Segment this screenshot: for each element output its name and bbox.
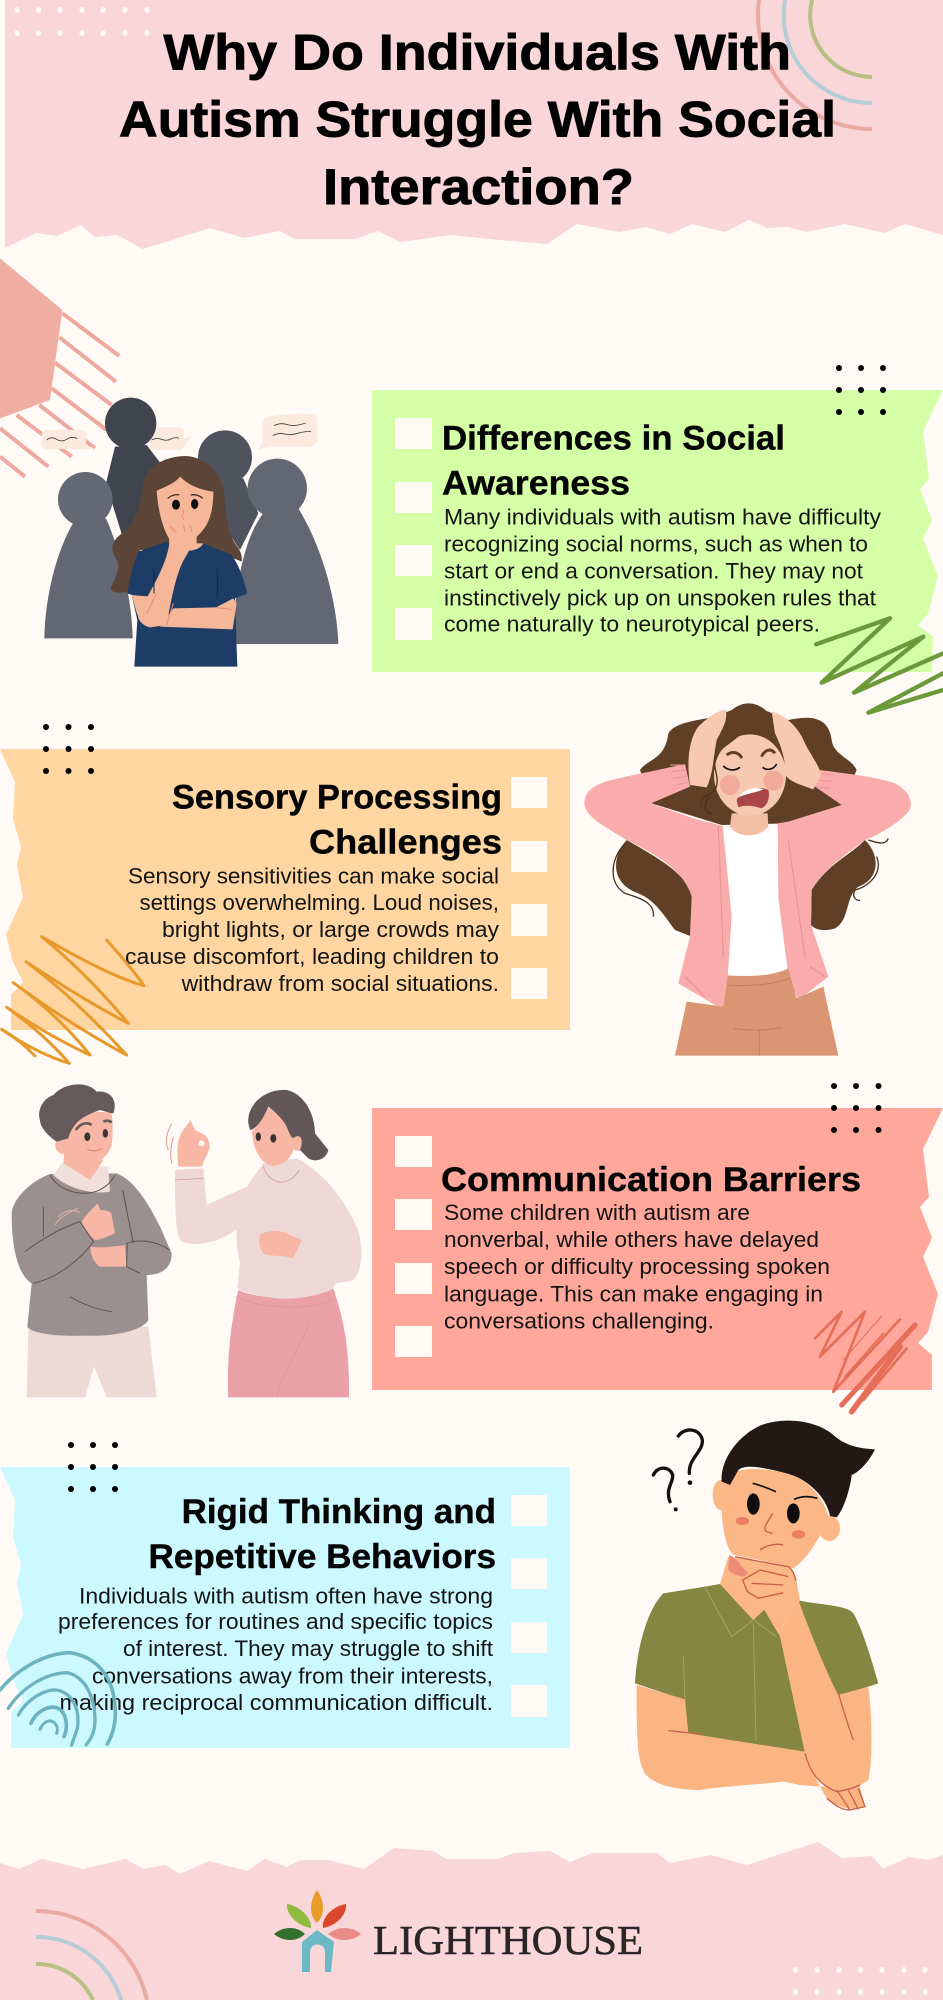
illustration: overwhelmed woman holding her head [584,703,911,1056]
neck [720,1557,764,1620]
scribble: red [815,1312,915,1412]
heading [148,1493,496,1576]
logo icon [274,1890,361,1972]
header rainbow arcs [758,0,872,129]
footer torn paper band [0,1842,943,2000]
body text: recognizing social norms, such as when to [444,532,868,556]
eyes and brows [723,764,777,770]
dots: blue panel [68,1442,118,1492]
header white dots [14,7,150,36]
body text [125,863,499,996]
panel: Rigid Thinking and Repetitive Behaviors [0,1467,570,1748]
heading: Repetitive Behaviors [148,1538,496,1576]
body text: cause discomfort, leading children to [125,944,499,969]
head [721,1469,828,1568]
illustration: thinking man with question marks [635,1421,878,1810]
header torn paper band [5,0,943,249]
ears [713,1480,729,1510]
dots: orange panel [43,724,94,774]
dots: green panel [836,365,886,415]
woman [228,1288,349,1397]
hand under chin [735,1557,800,1637]
pants [675,968,838,1056]
heading [172,779,502,862]
body text: withdraw from social situations. [181,971,499,996]
mouth [737,788,769,808]
body text: conversations challenging. [444,1309,714,1334]
cheeks [720,775,740,795]
dots: red panel [831,1083,882,1133]
heading: Awareness [442,464,630,502]
body text: of interest. They may struggle to shift [123,1636,493,1661]
panel: Differences in Social Awareness [372,390,943,672]
hair [722,1421,875,1517]
logo: Lighthouse [274,1890,643,1972]
arm [637,1685,820,1790]
body text: bright lights, or large crowds may [162,917,499,942]
heading [442,420,785,502]
body text: making reciprocal communication difficult. [60,1690,493,1715]
heading: Challenges [309,824,502,862]
hands [688,710,726,787]
illustration: anxious girl among silhouettes [42,398,338,667]
body text: instinctively pick up on unspoken rules that [444,586,876,611]
heading: Sensory Processing [172,779,502,817]
logo wordmark: LIGHTHOUSE [373,1917,643,1963]
body text: settings overwhelming. Loud noises, [140,890,499,915]
silhouettes [105,398,156,449]
scribble: orange [2,937,144,1063]
panel tabs [511,1495,547,1717]
body text: Sensory sensitivities can make social [128,863,499,888]
panel: Sensory Processing Challenges [0,749,570,1030]
question marks [653,1430,702,1502]
body text: nonverbal, while others have delayed [444,1227,819,1252]
body text [58,1584,493,1715]
title: Interaction? [323,159,634,215]
heading: Rigid Thinking and [182,1493,496,1531]
body text: language. This can make engaging in [444,1282,823,1306]
body text: preferences for routines and specific topics [58,1609,493,1634]
face [747,1493,760,1515]
body text: come naturally to neurotypical peers. [444,611,820,636]
footer white dots [793,1967,928,1995]
title [119,24,836,215]
heading: Differences in Social [442,420,785,458]
panel: Communication Barriers [372,1108,943,1390]
footer rainbow arcs [36,1911,147,2000]
body text: Many individuals with autism have difficulty [444,504,881,529]
body text: Individuals with autism often have strong [79,1584,493,1609]
cardigan [584,764,732,1007]
illustration: two people communicating [12,1084,361,1397]
decorative pink shape with stripes [0,258,119,477]
body text: conversations away from their interests, [92,1664,493,1688]
body text: speech or difficulty processing spoken [444,1254,830,1279]
scribble: blue rings [0,1653,115,1745]
panel tabs [395,418,432,640]
scribble: green [816,618,943,713]
panel tabs [395,1136,432,1357]
hair [640,703,857,825]
panel tabs [511,777,547,999]
shirt [723,827,788,975]
girl [111,456,242,593]
neck and face [730,813,768,835]
body text: start or end a conversation. They may not [444,558,863,584]
man [27,1327,157,1397]
speech bubbles [42,414,317,450]
title: Why Do Individuals With [164,24,791,80]
shirt [635,1584,878,1753]
heading: Communication Barriers [441,1161,861,1199]
body text [444,504,881,636]
body text: Some children with autism are [444,1200,750,1225]
title: Autism Struggle With Social [119,92,836,148]
body text [444,1200,830,1334]
